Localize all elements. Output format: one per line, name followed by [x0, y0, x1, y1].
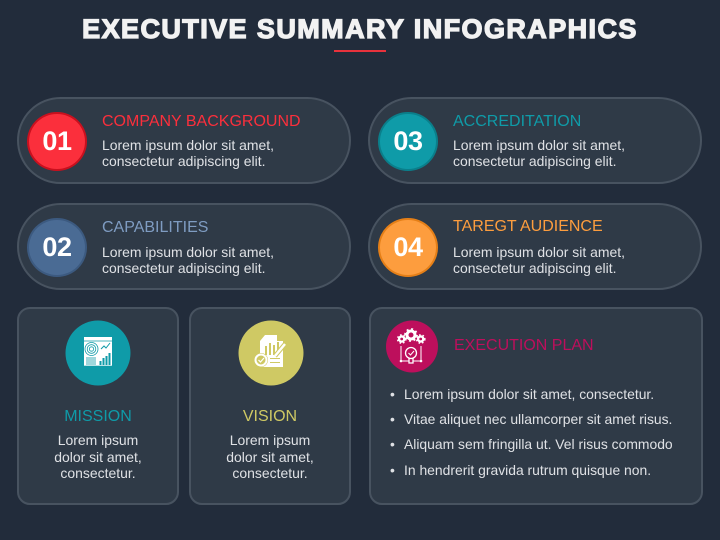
- bullet 3: Aliquam sem fringilla ut. Vel risus commodo: [404, 436, 673, 452]
- badge 04: 04: [393, 232, 423, 262]
- badge 01: 01: [42, 126, 72, 156]
- icon: mission dashboard: [66, 320, 130, 386]
- panel: accreditation: [368, 97, 702, 184]
- text: accreditation: consectetur adipiscing elit.: [453, 153, 616, 169]
- badge 03: 03: [393, 126, 423, 156]
- bullet 1: Lorem ipsum dolor sit amet, consectetur.: [404, 386, 654, 402]
- panel: vision: [189, 307, 351, 505]
- text: mission: Lorem ipsum: [58, 432, 138, 448]
- badge 02: 02: [42, 232, 72, 262]
- panel: target audience: [368, 203, 702, 290]
- text: company background: consectetur adipiscing elit.: [102, 153, 265, 169]
- heading: capabilities: CAPABILITIES: [102, 219, 208, 236]
- text: vision: [226, 432, 314, 481]
- heading: execution plan: EXECUTION PLAN: [454, 337, 594, 354]
- icon: vision report: [238, 320, 304, 386]
- heading: target audience: TAREGT AUDIENCE: [453, 218, 603, 235]
- text: accreditation: [453, 137, 625, 169]
- text: capabilities: consectetur adipiscing elit.: [102, 260, 265, 276]
- bullet 4: In hendrerit gravida rutrum quisque non.: [404, 462, 651, 478]
- text: target audience: Lorem ipsum dolor sit amet,: [453, 244, 625, 260]
- heading: accreditation: ACCREDITATION: [453, 113, 581, 130]
- heading: company background: COMPANY BACKGROUND: [102, 113, 301, 130]
- text: mission: dolor sit amet,: [54, 448, 142, 464]
- bullet list: [390, 386, 673, 478]
- text: capabilities: [102, 244, 274, 276]
- text: vision: consectetur.: [232, 465, 308, 481]
- panel: company background: [17, 97, 351, 184]
- text: capabilities: Lorem ipsum dolor sit amet,: [102, 244, 274, 260]
- badge 03: [378, 112, 438, 170]
- bullet 2: Vitae aliquet nec ullamcorper sit amet risus.: [404, 411, 672, 427]
- text: company background: [102, 137, 274, 169]
- heading: vision: VISION: [243, 408, 297, 425]
- text: vision: Lorem ipsum: [230, 432, 310, 448]
- title underline: [334, 50, 386, 52]
- title: EXECUTIVE SUMMARY INFOGRAPHICS: [82, 14, 638, 44]
- badge 02: [27, 218, 87, 276]
- text: mission: consectetur.: [60, 465, 136, 481]
- text: target audience: consectetur adipiscing elit.: [453, 260, 616, 276]
- panel: mission: [17, 307, 179, 505]
- text: mission: [54, 432, 142, 481]
- text: accreditation: Lorem ipsum dolor sit amet,: [453, 137, 625, 153]
- text: company background: Lorem ipsum dolor sit amet,: [102, 137, 274, 153]
- text: vision: dolor sit amet,: [226, 448, 314, 464]
- panel: capabilities: [17, 203, 351, 290]
- badge 04: [378, 218, 438, 276]
- panel: execution plan: [369, 307, 703, 505]
- heading: mission: MISSION: [64, 408, 132, 425]
- icon: execution gears and bulb: [386, 320, 438, 372]
- text: target audience: [453, 244, 625, 276]
- badge 01: [27, 112, 87, 170]
